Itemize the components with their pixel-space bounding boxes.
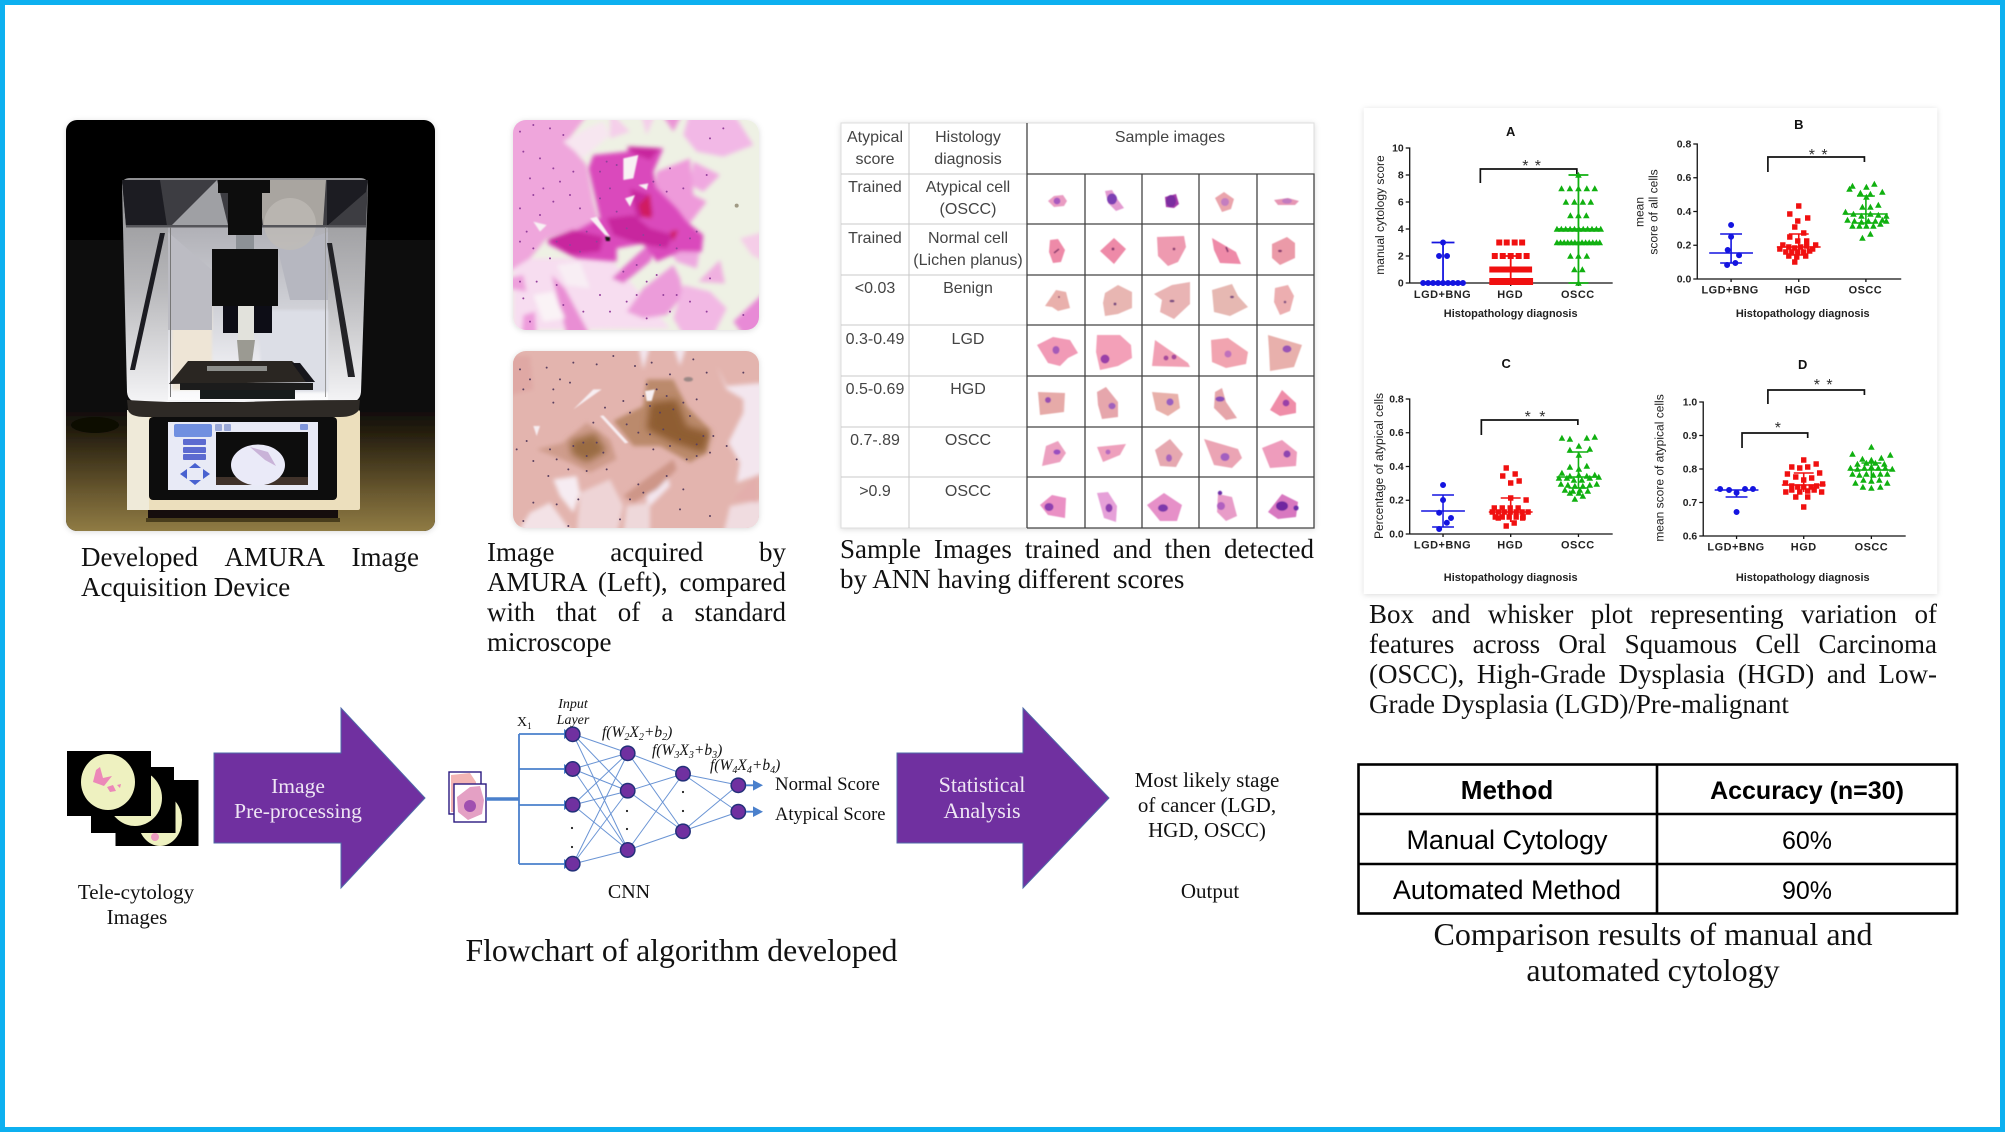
table headers [847, 129, 1225, 168]
table: method accuracy comparison: Method [1461, 775, 1553, 805]
caption: device [81, 542, 419, 602]
chart A: manual cytology score: 4 [1398, 224, 1404, 236]
chart D: mean score of atypical cells: LGD+BNG [1707, 541, 1765, 554]
layer labels: X [628, 724, 639, 741]
chart A: manual cytology score: HGD [1497, 289, 1523, 301]
label: output: Output [1181, 879, 1239, 903]
layer labels: ) [666, 724, 672, 741]
chart D: mean score of atypical cells: HGD [1791, 541, 1817, 554]
micrograph: AMURA image [503, 112, 765, 335]
sample cells: normal [1049, 236, 1295, 266]
caption: image comparison: with that of a standard [487, 597, 786, 627]
table: method accuracy comparison: Automated Method [1393, 875, 1621, 905]
chart D: mean score of atypical cells: OSCC [1855, 541, 1888, 554]
arrow: statistical analysis: Analysis [944, 798, 1020, 823]
caption: image comparison: AMURA (Left), compared [487, 567, 786, 597]
layer labels: 2 [662, 732, 667, 743]
chart B: mean score of all cells [1633, 117, 1901, 320]
chart B: mean score of all cells: mean [1633, 197, 1647, 227]
caption: sample images: Sample Images trained and then detected [840, 534, 1314, 564]
layer labels: 2 [624, 732, 629, 743]
layer labels: Input [557, 697, 589, 712]
table: method accuracy comparison: 60% [1782, 827, 1832, 855]
layer labels: 3 [673, 750, 679, 761]
arrow: statistical analysis: Statistical [939, 772, 1025, 797]
label: tele-cytology images [78, 880, 195, 929]
table headers: Atypical [847, 129, 903, 146]
layer labels: +b [644, 724, 662, 741]
chart D: mean score of atypical cells: 0.9 [1683, 431, 1697, 442]
chart C: percentage of atypical cells: OSCC [1561, 539, 1595, 552]
layer labels: 2 [639, 732, 644, 743]
chart C: percentage of atypical cells: HGD [1497, 539, 1523, 552]
layer labels: f(W [710, 757, 732, 774]
chart B: mean score of all cells: 0.0 [1677, 274, 1691, 286]
chart B: mean score of all cells: score of all cells [1646, 169, 1660, 255]
table row labels: LGD [952, 331, 984, 348]
output labels: Atypical Score [775, 805, 885, 825]
caption: box and whisker plot [1369, 599, 1937, 719]
network connections [573, 734, 738, 864]
caption: image comparison [487, 537, 786, 657]
table: method accuracy comparison: Accuracy (n=30) [1710, 777, 1904, 805]
chart D: mean score of atypical cells: * [1775, 420, 1781, 437]
chart A: manual cytology score [1373, 124, 1613, 320]
layer labels: 1 [527, 721, 532, 731]
label: tele-cytology images: Tele-cytology [78, 880, 195, 904]
layer labels: 3 [711, 750, 717, 761]
table headers: Sample images [1115, 129, 1225, 146]
sample cells: HGD [1038, 387, 1296, 420]
input arrows [486, 729, 572, 869]
sample cells: LGD [1037, 335, 1302, 371]
chart A: manual cytology score: Histopathology diagnosis [1444, 308, 1578, 320]
chart B: mean score of all cells: Histopathology diagnosis [1736, 308, 1870, 320]
table row labels: 0.5-0.69 [846, 381, 904, 398]
chart B: mean score of all cells: 0.6 [1677, 173, 1691, 184]
table: method accuracy comparison: 90% [1782, 877, 1832, 905]
layer labels: +b [752, 757, 770, 774]
chart D: mean score of atypical cells: Histopathology diagnosis [1736, 572, 1870, 584]
chart C: percentage of atypical cells: LGD+BNG [1414, 539, 1471, 552]
table row labels: OSCC [945, 432, 991, 449]
chart B: mean score of all cells: LGD+BNG [1701, 284, 1759, 297]
layer labels: 4 [770, 765, 775, 776]
diagram: CNN network [449, 697, 885, 903]
chart D: mean score of atypical cells: 0.6 [1683, 531, 1697, 543]
chart C: percentage of atypical cells: C [1502, 356, 1511, 371]
device base [127, 400, 360, 510]
label: CNN: CNN [608, 881, 650, 903]
output arrows [746, 780, 763, 817]
layer labels [517, 697, 780, 776]
arrow: statistical analysis [897, 708, 1109, 888]
table row labels: Atypical cell [926, 179, 1010, 196]
chart B: mean score of all cells: 0.8 [1677, 139, 1691, 151]
label: tele-cytology images: Images [107, 905, 167, 929]
chart D: mean score of atypical cells: 0.8 [1683, 464, 1697, 476]
chart C: percentage of atypical cells: 0.2 [1389, 495, 1404, 507]
caption: flowchart: Flowchart of algorithm developed [465, 933, 898, 968]
icon: stacked tele-cytology images [67, 751, 198, 846]
chart A: manual cytology score: 10 [1392, 143, 1404, 155]
caption: box and whisker plot: features across Oral Squamous Cell Carcinoma [1369, 629, 1937, 659]
layer labels: f(W [602, 724, 624, 741]
caption: device: Developed AMURA Image [81, 542, 419, 572]
layer labels: +b [694, 742, 712, 759]
chart C: percentage of atypical cells: Percentage of atypical cells [1372, 393, 1386, 539]
chart A: manual cytology score: 8 [1398, 170, 1404, 182]
table row labels: Trained [848, 230, 902, 247]
arrow: image pre-processing: Pre-processing [234, 799, 362, 823]
chart A: manual cytology score: manual cytology score [1373, 155, 1387, 275]
micrograph: standard microscope image [507, 346, 765, 534]
chart B: mean score of all cells: B [1794, 117, 1803, 132]
table row labels: OSCC [945, 483, 991, 500]
layer labels: ) [774, 757, 780, 774]
table row labels: HGD [950, 381, 986, 398]
chart C: percentage of atypical cells: Histopathology diagnosis [1444, 572, 1578, 584]
sample cells: OSCC low [1042, 439, 1297, 468]
caption: comparison results: Comparison results of manual and [1433, 916, 1873, 952]
caption: box and whisker plot: Grade Dysplasia (LGD)/Pre-malignant [1369, 689, 1789, 719]
table row labels: 0.7-.89 [850, 432, 900, 449]
sample cells: OSCC high [1040, 491, 1299, 522]
chart C: percentage of atypical cells: 0.8 [1389, 394, 1404, 406]
table row labels: >0.9 [859, 483, 891, 500]
arrow: image pre-processing [214, 708, 425, 888]
text: output stage: Most likely stage [1135, 768, 1279, 792]
chart C: percentage of atypical cells [1372, 356, 1613, 584]
sample cells: benign [1045, 282, 1294, 319]
caption: image comparison: microscope [487, 627, 611, 657]
table row labels: Normal cell [928, 230, 1008, 247]
table: sample images by atypical score [841, 123, 1314, 528]
chart C: percentage of atypical cells: 0.0 [1389, 529, 1404, 541]
layer labels: X [678, 742, 689, 759]
table: method accuracy comparison: Manual Cytology [1406, 825, 1608, 855]
table row labels [846, 179, 1023, 500]
layer labels: 3 [688, 750, 694, 761]
layer labels: ) [716, 742, 722, 759]
caption: image comparison: Image acquired by [487, 537, 786, 567]
table: method accuracy comparison [1358, 764, 1957, 914]
enclosure [122, 178, 368, 402]
chart A: manual cytology score: 2 [1398, 251, 1404, 263]
chart D: mean score of atypical cells: 0.7 [1683, 498, 1697, 509]
chart A: manual cytology score: 0 [1398, 278, 1404, 290]
output labels: Normal Score [775, 774, 880, 795]
table headers: Histology [935, 129, 1001, 146]
chart D: mean score of atypical cells: mean score of atypical cells [1652, 394, 1666, 542]
output labels [775, 774, 885, 825]
chart B: mean score of all cells: OSCC [1849, 284, 1882, 297]
arrow: image pre-processing: Image [271, 774, 325, 798]
table row labels: 0.3-0.49 [846, 331, 904, 348]
table row labels: Trained [848, 179, 902, 196]
sample cells: atypical OSCC [1048, 190, 1299, 212]
chart D: mean score of atypical cells [1652, 357, 1906, 584]
chart A: manual cytology score: LGD+BNG [1414, 289, 1471, 301]
chart A: manual cytology score: OSCC [1561, 289, 1595, 301]
layer labels: 4 [732, 765, 737, 776]
chart B: mean score of all cells: 0.4 [1677, 207, 1691, 218]
caption: device: Acquisition Device [81, 572, 290, 602]
network nodes [566, 727, 746, 871]
chart D: mean score of atypical cells: D [1798, 357, 1807, 372]
caption: comparison results [1433, 916, 1873, 988]
chart A: manual cytology score: A [1506, 124, 1516, 139]
chart B: mean score of all cells: HGD [1785, 284, 1811, 297]
table row labels: (Lichen planus) [913, 252, 1023, 269]
microscope column [169, 180, 315, 399]
caption: box and whisker plot: Box and whisker plot representing variation of [1369, 599, 1937, 629]
layer labels: X [736, 757, 747, 774]
chart C: percentage of atypical cells: 0.6 [1389, 428, 1404, 439]
panel: box and whisker charts [1364, 108, 1937, 594]
photo: AMURA image acquisition device [66, 120, 435, 531]
layer labels: f(W [652, 742, 674, 759]
chart C: percentage of atypical cells: * * [1525, 409, 1547, 426]
table row labels: (OSCC) [940, 201, 996, 218]
chart C: percentage of atypical cells: 0.4 [1389, 462, 1404, 473]
chart B: mean score of all cells: 0.2 [1677, 240, 1691, 252]
caption: sample images [840, 534, 1314, 594]
layer labels: X [517, 715, 527, 730]
text: output stage [1135, 768, 1279, 842]
chart A: manual cytology score: 6 [1398, 197, 1404, 209]
chart A: manual cytology score: * * [1522, 158, 1542, 175]
layer labels: 4 [747, 765, 752, 776]
table headers: score [855, 151, 895, 168]
input cell images [449, 772, 486, 822]
text: output stage: of cancer (LGD, [1138, 793, 1276, 817]
table row labels: Benign [943, 280, 993, 297]
table headers: diagnosis [934, 151, 1002, 168]
chart D: mean score of atypical cells: * * [1814, 377, 1834, 394]
caption: box and whisker plot: (OSCC), High-Grade Dysplasia (HGD) and Low- [1369, 659, 1937, 689]
chart B: mean score of all cells: * * [1809, 147, 1829, 164]
caption: sample images: by ANN having different scores [840, 564, 1184, 594]
caption: comparison results: automated cytology [1526, 952, 1780, 988]
chart D: mean score of atypical cells: 1.0 [1683, 397, 1697, 409]
layer labels: Layer [556, 713, 590, 728]
text: output stage: HGD, OSCC) [1148, 818, 1266, 842]
table row labels: <0.03 [855, 280, 895, 297]
